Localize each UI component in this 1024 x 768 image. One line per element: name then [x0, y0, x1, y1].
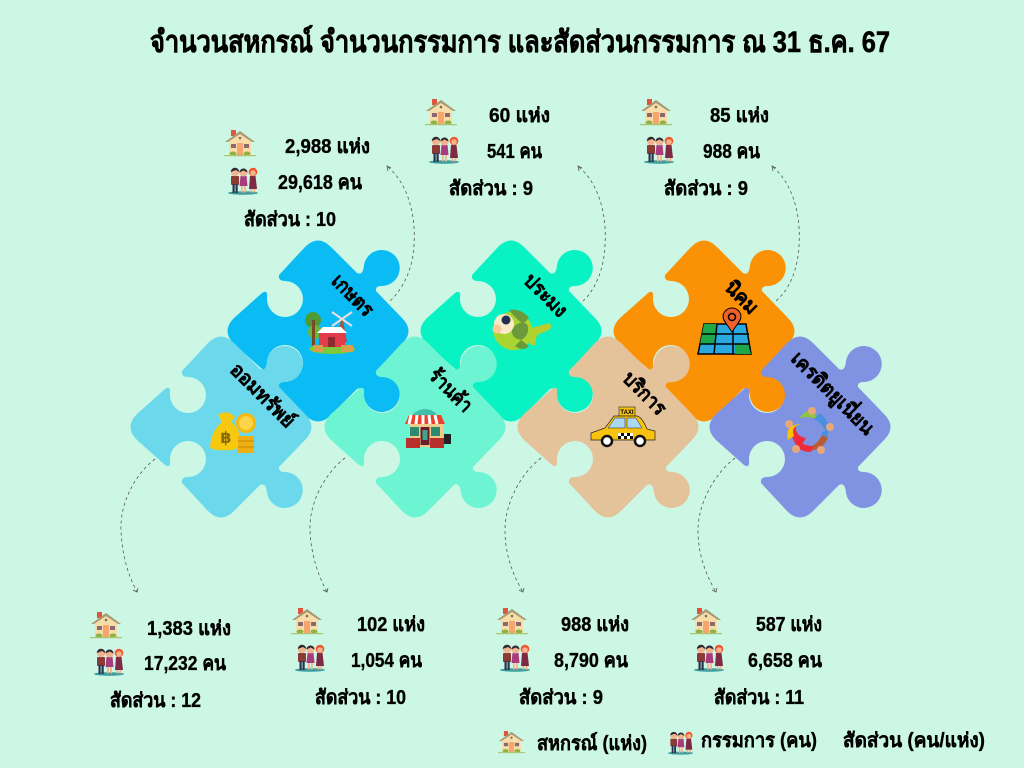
puzzle piece: ร้านค้า: [324, 336, 506, 518]
data block: เกษตร: สัดส่วน : 10: [244, 209, 336, 231]
label: บริการ: บริการ: [618, 368, 671, 420]
data block: นิคม: [640, 99, 769, 200]
connector: บริการ: [505, 458, 541, 592]
legend: สหกรณ์ (แห่ง): [537, 732, 647, 755]
icon: money bag and coins: ฿: [220, 430, 232, 447]
icon: money bag and coins: [210, 412, 256, 453]
data block: ประมง: 541 คน: [487, 141, 542, 163]
connector: ประมง: [578, 166, 605, 301]
data block: เกษตร: [224, 130, 370, 231]
data block: นิคม: 988 คน: [703, 141, 760, 163]
puzzle piece: นิคม: [614, 240, 794, 422]
connector: เครดิตยูเนี่ยน: [698, 458, 735, 592]
data block: ร้านค้า: 1,054 คน: [351, 650, 422, 672]
icon: fish: [487, 305, 551, 357]
label: ประมง: ประมง: [519, 270, 571, 322]
data block: ออมทรัพย์: 17,232 คน: [144, 653, 226, 675]
data block: เครดิตยูเนี่ยน: [690, 608, 822, 709]
connector: นิคม: [772, 166, 799, 301]
data block: บริการ: [496, 608, 629, 709]
data block: ประมง: [425, 99, 550, 200]
label: ออมทรัพย์: ออมทรัพย์: [226, 358, 300, 432]
data block: เกษตร: 2,988 แห่ง: [285, 136, 370, 158]
puzzle piece: เกษตร: [228, 240, 408, 422]
data block: ร้านค้า: [291, 608, 425, 709]
data block: ร้านค้า: 102 แห่ง: [357, 614, 425, 636]
puzzle piece: เครดิตยูเนี่ยน: [710, 336, 890, 518]
legend: [498, 730, 985, 755]
data block: เครดิตยูเนี่ยน: 6,658 คน: [748, 650, 822, 672]
title: จำนวนสหกรณ์ จำนวนกรรมการ และสัดส่วนกรรมการ ณ 31 ธ.ค. 67: [150, 25, 890, 59]
connector: ออมทรัพย์: [121, 459, 155, 592]
icon: farm: [305, 312, 355, 354]
icon: taxi: TAXI: [620, 410, 634, 416]
connector: เกษตร: [387, 166, 414, 301]
data block: ออมทรัพย์: สัดส่วน : 12: [110, 690, 201, 712]
data block: ประมง: 60 แห่ง: [489, 105, 550, 127]
icon: people circle: [785, 407, 834, 454]
legend: สัดส่วน (คน/แห่ง): [843, 730, 985, 752]
data block: บริการ: 8,790 คน: [554, 650, 628, 672]
data block: เครดิตยูเนี่ยน: สัดส่วน : 11: [714, 687, 804, 709]
label: เกษตร: เกษตร: [327, 270, 378, 321]
icon: taxi: [591, 407, 655, 446]
data block: นิคม: 85 แห่ง: [710, 105, 769, 127]
icon: map: [698, 308, 751, 354]
connector: ร้านค้า: [310, 458, 345, 592]
data block: ออมทรัพย์: 1,383 แห่ง: [147, 618, 231, 640]
icon: shop: [405, 409, 451, 448]
data block: บริการ: สัดส่วน : 9: [519, 687, 603, 709]
puzzle piece: ออมทรัพย์: [130, 336, 312, 518]
label: นิคม: นิคม: [720, 276, 763, 319]
label: เครดิตยูเนี่ยน: เครดิตยูเนี่ยน: [785, 344, 882, 441]
label: ร้านค้า: ร้านค้า: [424, 364, 477, 417]
data block: บริการ: 988 แห่ง: [561, 614, 629, 636]
data block: เครดิตยูเนี่ยน: 587 แห่ง: [756, 614, 822, 636]
data block: ออมทรัพย์: [90, 612, 231, 712]
puzzle piece: บริการ: [518, 336, 698, 518]
data block: ร้านค้า: สัดส่วน : 10: [315, 687, 406, 709]
data block: ประมง: สัดส่วน : 9: [449, 178, 533, 200]
data block: เกษตร: 29,618 คน: [278, 172, 362, 194]
legend: กรรมการ (คน): [701, 730, 817, 752]
data block: นิคม: สัดส่วน : 9: [664, 178, 748, 200]
puzzle piece: ประมง: [420, 240, 602, 422]
